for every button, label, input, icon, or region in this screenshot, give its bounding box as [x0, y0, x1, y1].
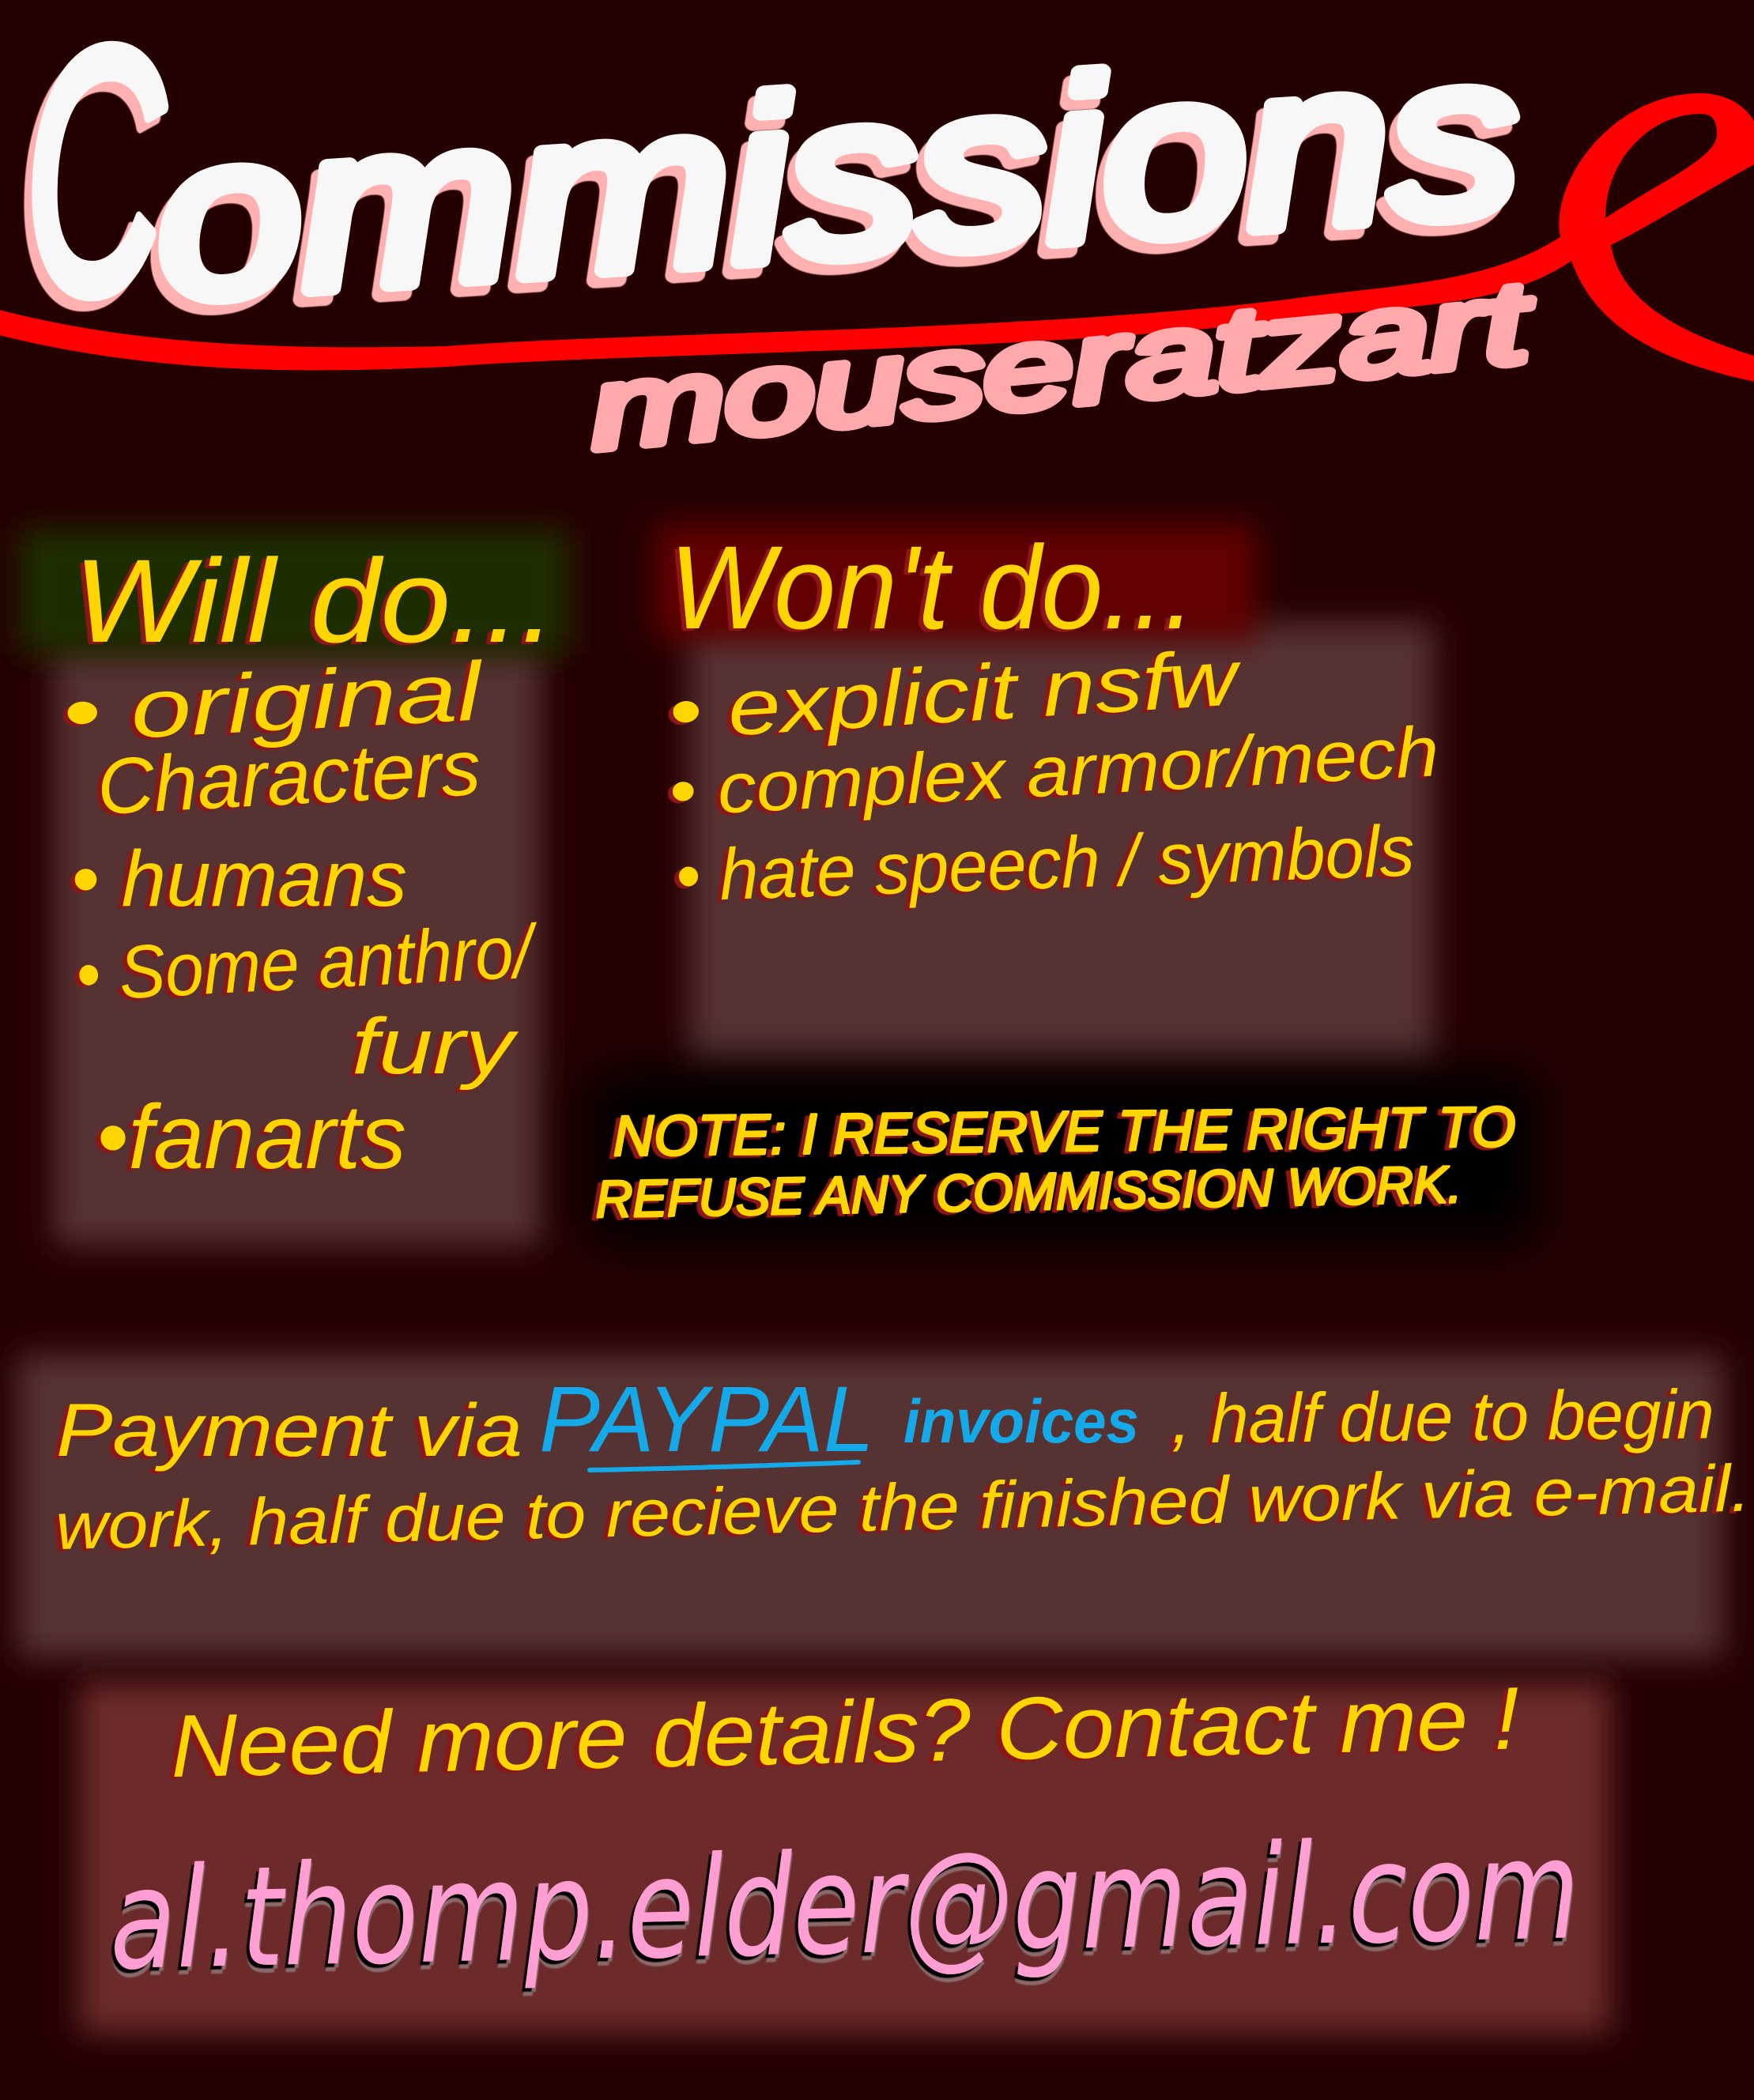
panel: note background [589, 1071, 1540, 1245]
panel: won't do list background [689, 623, 1434, 1063]
item: some anthro/fury: • Some anthro/ [74, 909, 541, 1017]
payment line 1 tail: , [1171, 1379, 1191, 1458]
item: fanarts: •fanarts [96, 1087, 406, 1188]
invoices: invoices [903, 1386, 1139, 1456]
payment line 1 tail: half due to begin [1210, 1374, 1714, 1457]
note text: REFUSE ANY COMMISSION WORK. [595, 1155, 1462, 1228]
panel: contact background [79, 1682, 1611, 2034]
payment text [55, 1367, 1752, 1563]
red swoosh ribbon [0, 93, 1754, 383]
item: some anthro/fury [74, 909, 541, 1091]
item: complex armor/mech: • complex armor/mech [667, 712, 1441, 831]
payment line 2: work, half due to recieve the finished work via e-mail. [55, 1450, 1752, 1563]
title: Commissions: ommissions [149, 4, 1526, 348]
heading: Won't do...: Won't do... [670, 521, 1195, 654]
list: won't do items [666, 633, 1441, 917]
list: will do items [60, 645, 541, 1188]
item: original characters [60, 645, 486, 831]
PayPal wordmark: PAYPAL [539, 1367, 874, 1472]
item: explicit nsfw: • explicit nsfw [666, 633, 1245, 756]
note text: NOTE: I RESERVE THE RIGHT TO [613, 1095, 1516, 1168]
subtitle: mouseratzart: mouseratzart [585, 257, 1540, 473]
panel: payment background [17, 1355, 1723, 1657]
item: hate speech/symbols: • hate speech / symbols [674, 810, 1416, 917]
contact heading: Need more details? Contact me ! [170, 1668, 1520, 1796]
panel: will do header background [20, 529, 569, 654]
item: some anthro/fury: fury [352, 1002, 519, 1091]
item: original characters: • original [60, 645, 486, 760]
panel: won't do header background [656, 525, 1256, 640]
heading: Will do...: Will do... [74, 534, 556, 667]
note text [595, 1095, 1516, 1228]
payment line 1 lead: Payment via [56, 1389, 522, 1472]
item: humans: • humans [71, 835, 407, 923]
item: original characters: Characters [95, 723, 482, 831]
panel: will do list background [54, 644, 541, 1245]
